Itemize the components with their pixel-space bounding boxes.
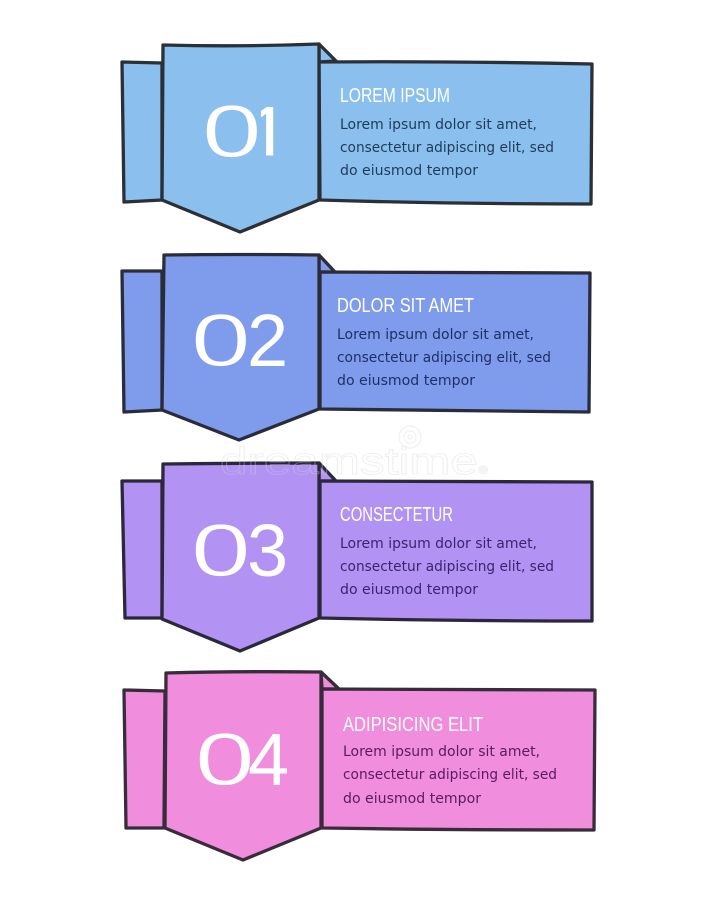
- panel: step 02: [122, 254, 590, 440]
- body 02: consectetur adipiscing elit, sed: [337, 350, 551, 366]
- body 01: Lorem ipsum dolor sit amet,: [340, 117, 537, 133]
- number 04: 0: [195, 718, 255, 801]
- shield 04: [165, 672, 321, 860]
- shield 03: [162, 463, 319, 651]
- number 02: 0: [191, 299, 251, 382]
- back strip 04: [124, 690, 165, 828]
- body 01: consectetur adipiscing elit, sed: [340, 140, 554, 156]
- back strip 03: [122, 481, 162, 618]
- number 02: [191, 299, 288, 382]
- fold 04: [321, 672, 339, 689]
- heading 03: CONSECTETUR: [340, 504, 453, 526]
- number 04: [195, 718, 289, 801]
- number 01: 1: [246, 90, 290, 179]
- number 03: 0: [191, 509, 251, 592]
- panel: step 04: [124, 672, 595, 860]
- back strip 01: [122, 62, 162, 202]
- number 03: 3: [247, 509, 288, 592]
- body 04: do eiusmod tempor: [343, 791, 481, 807]
- text box 02: [320, 272, 590, 412]
- body 03: do eiusmod tempor: [340, 582, 478, 598]
- shield 01: [162, 44, 319, 232]
- heading 04: ADIPISICING ELIT: [343, 714, 483, 736]
- body 03: consectetur adipiscing elit, sed: [340, 559, 554, 575]
- body 01: do eiusmod tempor: [340, 163, 478, 179]
- fold 02: [319, 255, 335, 272]
- watermark: [220, 426, 488, 483]
- text box 04: [322, 689, 595, 830]
- body 02: do eiusmod tempor: [337, 373, 475, 389]
- fold 01: [319, 44, 336, 62]
- body 04: Lorem ipsum dolor sit amet,: [343, 744, 540, 760]
- panel: step 03: [122, 463, 592, 651]
- number 03: [191, 509, 288, 592]
- body 02: Lorem ipsum dolor sit amet,: [337, 327, 534, 343]
- text box 03: [320, 481, 592, 621]
- number 02: 2: [247, 299, 288, 382]
- shield 02: [162, 254, 319, 440]
- back strip 02: [122, 271, 162, 412]
- watermark dot: [478, 465, 488, 475]
- body 04: consectetur adipiscing elit, sed: [343, 767, 557, 783]
- number 01: [206, 105, 274, 158]
- watermark spiral: [399, 426, 421, 448]
- number 01: 0: [202, 90, 262, 173]
- fold 03: [319, 463, 336, 481]
- panel: step 01: [122, 44, 592, 232]
- body 03: Lorem ipsum dolor sit amet,: [340, 536, 537, 552]
- heading 02: DOLOR SIT AMET: [337, 295, 474, 317]
- infographic canvas: [120, 42, 597, 862]
- heading 01: LOREM IPSUM: [340, 85, 450, 107]
- number 04: 4: [248, 718, 289, 801]
- watermark wordmark: dreamstime: [220, 441, 478, 483]
- text box 01: [319, 62, 592, 204]
